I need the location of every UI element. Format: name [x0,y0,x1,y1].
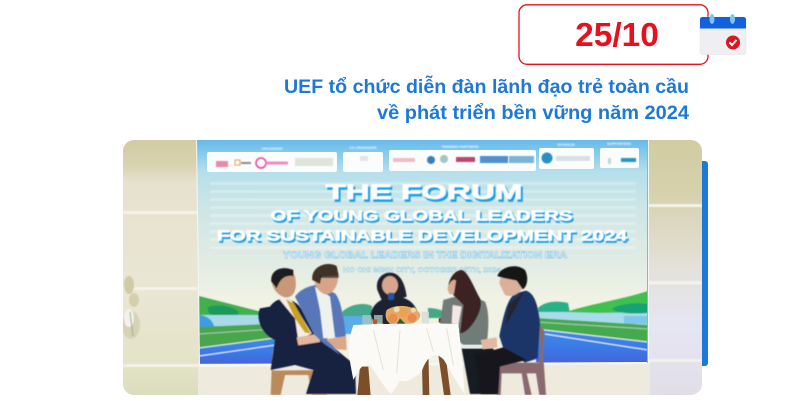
wall joints [123,204,702,367]
logo strip headings: SUPPORTERS [607,142,632,146]
panel speakers [259,264,546,396]
title: về phát triển bền vững năm 2024 [377,102,689,124]
screen headline [217,181,628,274]
glasses on table [362,312,445,325]
speaker 3 [371,273,417,325]
left side [199,296,260,316]
round table with cloth [349,323,465,396]
headline text: FOR SUSTAINABLE DEVELOPMENT 2024 [217,228,627,244]
headline shadow [218,184,628,246]
photo: forum panel [122,140,702,396]
logo strip headings: CO-ORGANIZER [349,146,377,150]
speaker 2 [295,264,347,355]
headline shadow: THE FORUM [328,184,524,206]
right side [538,302,570,313]
logo strip headings: ORGANIZER [262,147,283,151]
accent bar: blue [698,161,708,366]
speaker 1 with chair [259,268,356,395]
headline shadow: OF YOUNG GLOBAL LEADERS [272,210,574,226]
logo strip headings [262,142,632,151]
floor strip [198,362,650,395]
headline text [217,181,627,244]
landscape [199,291,648,364]
date text: 25/10 [575,17,659,54]
flower arrangement [386,306,420,325]
screen [196,140,649,368]
title: UEF tổ chức diễn đàn lãnh đạo trẻ toàn cầu [284,74,689,98]
speaker 4 [440,270,497,394]
speaker 5 with chair [462,266,546,395]
screen stripes [210,182,636,249]
logo strip headings: SPONSOR [557,143,575,147]
icon: calendar [700,14,746,54]
subtitle text: YOUNG GLOBAL LEADERS IN THE DIGITALIZATION ERA [283,250,567,261]
orchid decoration [122,276,140,339]
centre side [342,304,372,316]
headline text: THE FORUM [326,181,522,204]
headline text: OF YOUNG GLOBAL LEADERS [270,208,573,224]
date and place text: HO CHI MINH CITY, OCTOBER 25TH, 2024 [343,267,501,274]
headline shadow: FOR SUSTAINABLE DEVELOPMENT 2024 [218,230,628,246]
title [284,74,689,124]
wall right [645,140,702,395]
sponsor logo strip [207,142,639,172]
date box [519,5,708,64]
logo strip headings: TRAINING PARTNERS [442,145,479,149]
wall left [123,140,203,395]
